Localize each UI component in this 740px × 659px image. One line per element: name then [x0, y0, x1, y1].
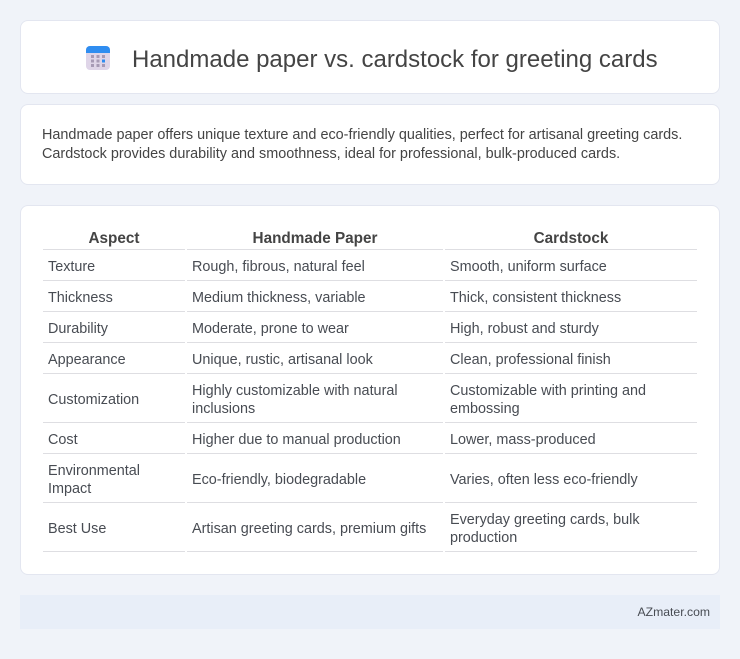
table content: Thickness	[48, 290, 113, 306]
table content: embossing	[450, 401, 520, 417]
table content: Highly customizable with natural	[192, 383, 398, 399]
table content: Varies, often less eco-friendly	[450, 472, 638, 488]
table content: Medium thickness, variable	[192, 290, 366, 306]
table content: Aspect	[88, 230, 140, 247]
table content: Handmade Paper	[253, 230, 377, 247]
footer brand: AZmater.com	[638, 605, 710, 619]
panel: title	[20, 20, 720, 94]
table content: Customization	[48, 392, 139, 408]
table content: High, robust and sturdy	[450, 321, 599, 337]
footer bar	[20, 595, 720, 629]
table content: Appearance	[48, 352, 126, 368]
table content: Cardstock	[534, 230, 608, 247]
summary paragraph: Cardstock provides durability and smoothness, ideal for professional, bulk-produced cards.	[42, 146, 620, 162]
table content: Texture	[48, 259, 95, 275]
table content: Moderate, prone to wear	[192, 321, 349, 337]
table content: Environmental	[48, 463, 140, 479]
icon: calendar	[86, 46, 110, 70]
table content: Unique, rustic, artisanal look	[192, 352, 373, 368]
table content: Rough, fibrous, natural feel	[192, 259, 365, 275]
table content: Lower, mass-produced	[450, 432, 596, 448]
table content: Eco-friendly, biodegradable	[192, 472, 366, 488]
table content: Durability	[48, 321, 108, 337]
table content: inclusions	[192, 401, 255, 417]
table content: Thick, consistent thickness	[450, 290, 621, 306]
table content: Smooth, uniform surface	[450, 259, 607, 275]
table content: Customizable with printing and	[450, 383, 646, 399]
table content: production	[450, 530, 517, 546]
table content: Artisan greeting cards, premium gifts	[192, 521, 426, 537]
summary paragraph: Handmade paper offers unique texture and eco-friendly qualities, perfect for artisanal greeting cards.	[42, 127, 682, 143]
table content: Best Use	[48, 521, 106, 537]
panel: comparison table	[20, 205, 720, 575]
panel: summary text	[20, 104, 720, 185]
table content: Impact	[48, 481, 91, 497]
table content: Cost	[48, 432, 78, 448]
table content: Everyday greeting cards, bulk	[450, 512, 640, 528]
summary paragraph	[42, 127, 682, 162]
heading: Handmade paper vs. cardstock for greeting cards	[132, 46, 658, 73]
table content: Higher due to manual production	[192, 432, 401, 448]
table content: Clean, professional finish	[450, 352, 611, 368]
